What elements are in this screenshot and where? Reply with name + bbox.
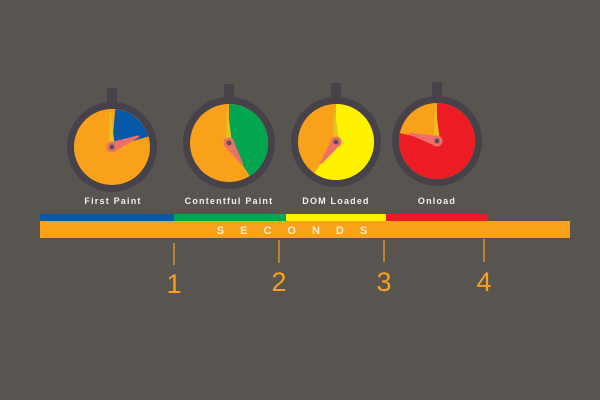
labels: Onload — [418, 196, 456, 206]
clock: DOM Loaded — [291, 83, 381, 187]
labels — [84, 196, 456, 206]
labels: First Paint — [84, 196, 142, 206]
ticks and numbers: 3 — [376, 267, 392, 297]
ticks and numbers — [166, 239, 492, 299]
labels: Contentful Paint — [185, 196, 273, 206]
ticks and numbers: 2 — [271, 267, 287, 297]
clock: Contentful Paint — [183, 84, 275, 189]
seconds bar: SECONDS — [217, 225, 383, 237]
labels: DOM Loaded — [302, 196, 370, 206]
ticks and numbers: 4 — [476, 267, 492, 297]
clock: Onload — [392, 82, 482, 186]
clock: First Paint — [67, 88, 157, 192]
ticks and numbers: 1 — [166, 269, 182, 299]
seconds bar — [40, 221, 570, 238]
timeline color segments — [40, 214, 487, 221]
